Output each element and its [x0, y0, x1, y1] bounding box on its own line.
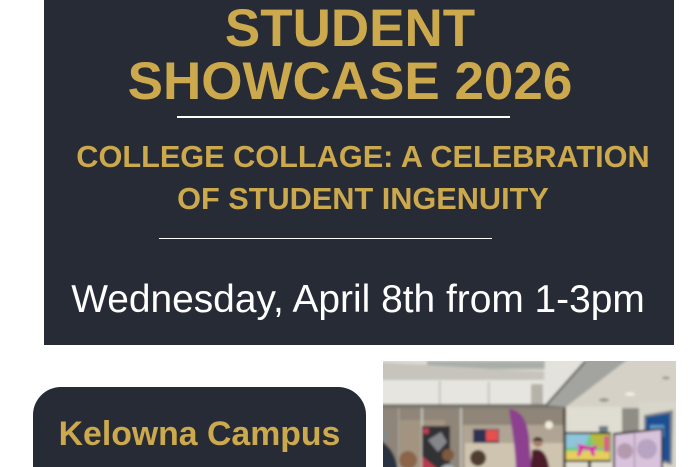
date and time: Wednesday, April 8th from 1-3pm — [71, 278, 645, 321]
subtitle: COLLEGE COLLAGE: A CELEBRATION — [76, 139, 650, 174]
panel: event header — [44, 0, 674, 345]
title: SHOWCASE 2026 — [128, 52, 572, 111]
panel: campus — [33, 387, 366, 467]
photo: showcase event — [383, 361, 676, 467]
divider: under subtitle — [159, 238, 492, 239]
subtitle — [76, 139, 650, 216]
right screen: sketch — [613, 428, 663, 467]
purple flag banner — [509, 409, 532, 467]
banner stand — [422, 426, 450, 467]
left screen: dog graphic — [565, 432, 611, 467]
campus name: Kelowna Campus — [59, 415, 340, 453]
subtitle: OF STUDENT INGENUITY — [177, 181, 549, 216]
ceiling and upper walls — [376, 354, 684, 408]
back walls and artwork — [566, 402, 684, 467]
wall display — [473, 429, 499, 443]
title — [128, 0, 572, 111]
glass storefront — [376, 408, 566, 467]
audience — [376, 431, 486, 467]
presenter — [530, 437, 550, 467]
title: STUDENT — [225, 0, 475, 58]
divider: under title — [177, 116, 510, 118]
